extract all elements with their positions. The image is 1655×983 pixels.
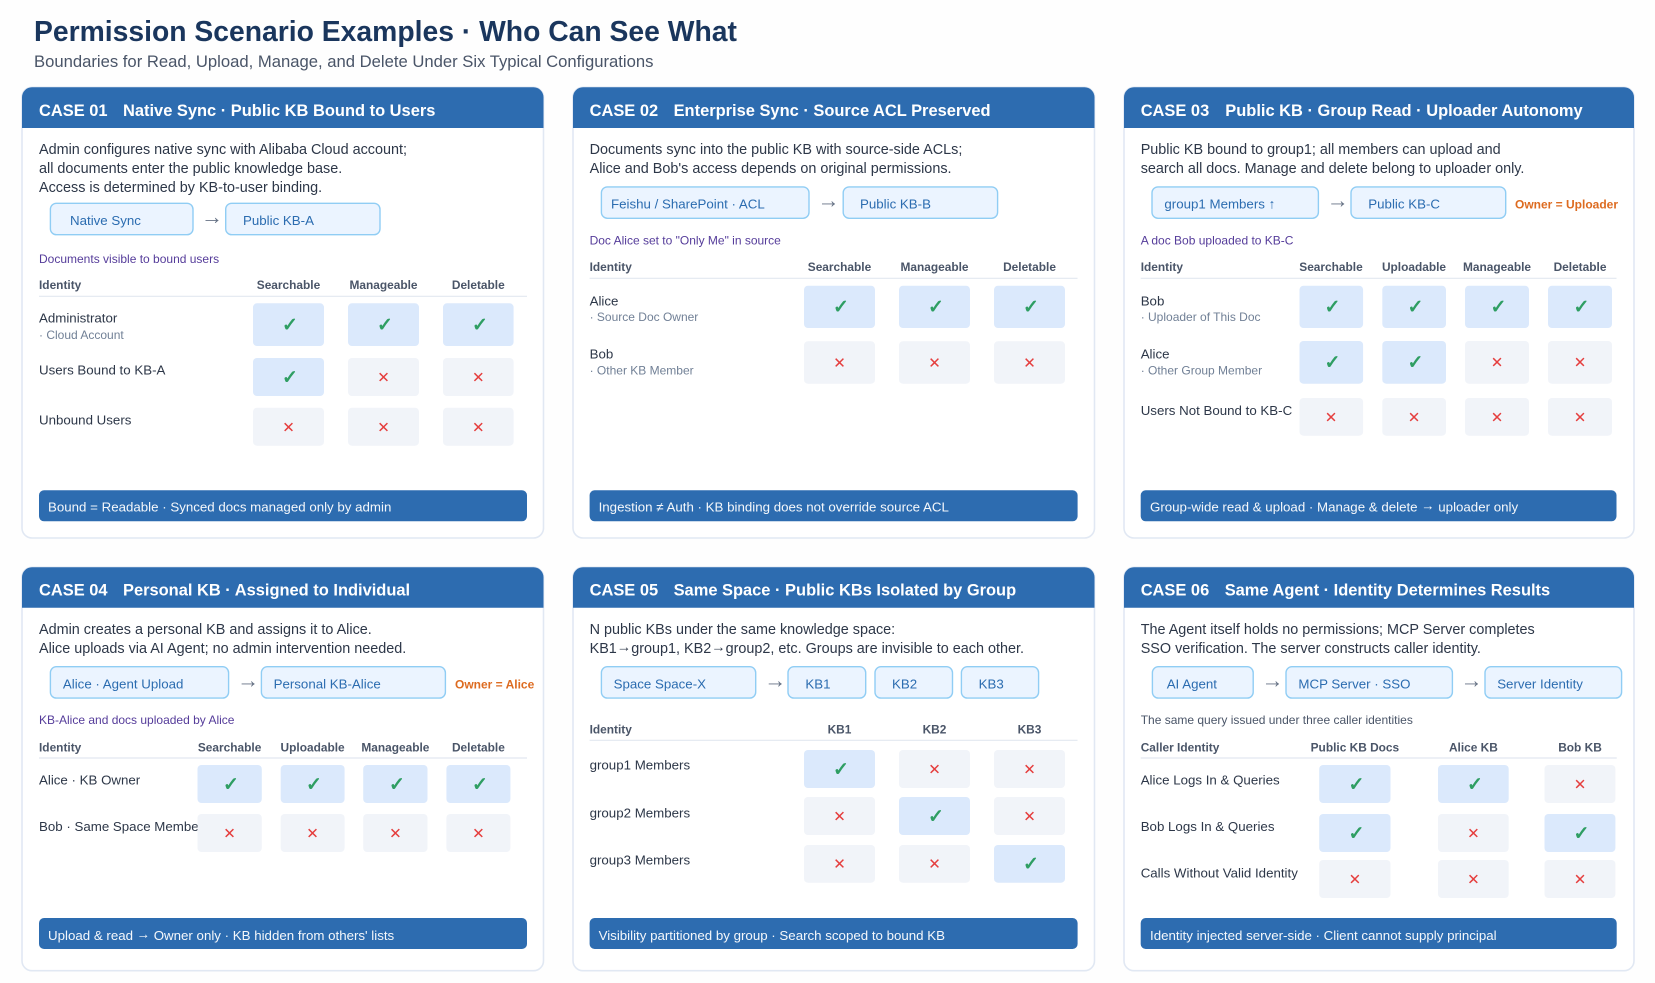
row: Bob Logs In & Queries: ✓ <box>1348 822 1364 844</box>
flow diagram: → <box>201 204 223 229</box>
summary bar: Visibility partitioned by group · Search scoped to bound KB <box>599 928 945 943</box>
row: Alice Logs In & Queries: ✕ <box>1574 776 1586 794</box>
flow diagram: KB3 <box>979 676 1004 691</box>
flow diagram: Owner = Uploader <box>1515 198 1618 212</box>
note: Doc Alice set to "Only Me" in source <box>590 233 781 247</box>
description <box>1141 622 1535 657</box>
summary bar <box>1141 918 1617 949</box>
header: case 05 <box>573 567 1094 608</box>
row: Users Bound to KB-A: Users Bound to KB-A <box>39 363 166 378</box>
row: group1 Members: group1 Members <box>590 758 690 773</box>
row: Calls Without Valid Identity <box>1141 860 1615 898</box>
row: group3 Members: group3 Members <box>590 853 690 868</box>
row: Administrator: · Cloud Account <box>39 328 124 342</box>
row: Bob: · Uploader of This Doc <box>1141 310 1261 324</box>
note: KB-Alice and docs uploaded by Alice <box>39 713 235 727</box>
flow diagram: Public KB-A <box>243 213 314 228</box>
row: Users Not Bound to KB-C: ✕ <box>1408 409 1420 427</box>
row: group3 Members: ✕ <box>928 855 941 873</box>
flow diagram <box>601 187 998 218</box>
row: Alice <box>590 286 1065 328</box>
title: Permission Scenario Examples · Who Can See What <box>34 15 737 47</box>
description <box>590 142 962 177</box>
row: Users Not Bound to KB-C: ✕ <box>1574 409 1586 427</box>
row: Bob Logs In & Queries: Bob Logs In & Queries <box>1141 819 1275 834</box>
summary bar <box>39 490 527 521</box>
description: Admin creates a personal KB and assigns it to Alice. <box>39 622 372 638</box>
summary bar: Bound = Readable · Synced docs managed only by admin <box>48 500 391 514</box>
row: Bob Same Space Member: ✕ <box>306 825 319 843</box>
row: Alice KB Owner: ✓ <box>223 774 239 796</box>
header: case 06 <box>1124 567 1634 608</box>
row: Alice KB Owner <box>39 765 510 803</box>
row: Alice KB Owner: Alice · KB Owner <box>39 773 141 788</box>
row: Bob Logs In & Queries <box>1141 814 1615 852</box>
flow diagram: Native Sync <box>70 213 141 228</box>
table header: Alice KB <box>1449 740 1498 754</box>
note: Documents visible to bound users <box>39 252 219 266</box>
row: Bob: ✕ <box>928 354 941 372</box>
row: Administrator: ✓ <box>282 314 298 336</box>
table header: Public KB Docs <box>1311 740 1400 754</box>
summary bar <box>1141 490 1616 521</box>
table header: Identity <box>590 722 632 736</box>
row: group3 Members: ✕ <box>833 855 846 873</box>
row: Alice: ✓ <box>928 296 944 318</box>
panel: case 04 <box>22 567 544 971</box>
table header <box>39 740 527 758</box>
flow diagram: → <box>1460 667 1482 692</box>
row: Alice Logs In & Queries: Alice Logs In & Queries <box>1141 773 1280 788</box>
row: group2 Members: ✓ <box>928 806 944 828</box>
description: The Agent itself holds no permissions; MCP Server completes <box>1141 622 1535 638</box>
description: Alice and Bob's access depends on original permissions. <box>590 161 952 177</box>
header: case 02 <box>573 87 1094 128</box>
row: group1 Members: ✕ <box>928 761 941 779</box>
row: Bob: Bob <box>590 347 613 362</box>
flow diagram: Alice · Agent Upload <box>63 676 183 691</box>
header: case 02: Enterprise Sync · Source ACL Preserved <box>674 102 991 120</box>
row: Alice Logs In & Queries: ✓ <box>1348 774 1364 796</box>
row: Alice: Alice <box>590 293 618 308</box>
table header: Deletable <box>1554 260 1607 274</box>
row: group2 Members: ✕ <box>1023 808 1036 826</box>
row: group3 Members: ✓ <box>1023 853 1039 875</box>
flow diagram: → <box>1327 188 1349 213</box>
row: group1 Members <box>590 750 1065 788</box>
row: Unbound Users: ✕ <box>472 418 485 436</box>
description: Public KB bound to group1; all members can upload and <box>1141 142 1501 158</box>
table header: Manageable <box>1463 260 1531 274</box>
table header: Caller Identity <box>1141 740 1220 754</box>
row: Unbound Users: ✕ <box>282 418 295 436</box>
description: group1, KB2 <box>631 641 711 657</box>
flow diagram <box>50 667 535 698</box>
row: Bob: Bob <box>1141 293 1164 308</box>
table header: Manageable <box>361 740 430 754</box>
row: group3 Members <box>590 845 1065 883</box>
flow diagram: → <box>818 188 840 213</box>
row: Alice: ✓ <box>1325 352 1340 374</box>
flow diagram: → <box>1262 667 1284 692</box>
description: N public KBs under the same knowledge space: <box>590 622 895 638</box>
table header: Uploadable <box>281 740 345 754</box>
row: Bob Same Space Member: ✕ <box>389 825 402 843</box>
row: Bob: ✕ <box>1023 354 1036 372</box>
header: case 03 <box>1124 87 1634 128</box>
summary bar: → <box>137 926 150 942</box>
row: Bob Logs In & Queries: ✕ <box>1467 825 1480 843</box>
description: group2, etc. Groups are invisible to each other. <box>726 641 1024 657</box>
summary bar: Owner only · KB hidden from others' lists <box>150 928 395 943</box>
row: Users Not Bound to KB-C: Users Not Bound to KB-C <box>1141 403 1293 418</box>
panel: case 05 <box>573 567 1094 971</box>
row: group1 Members: ✓ <box>833 758 849 780</box>
table header: Deletable <box>1003 260 1056 274</box>
header: case 04: CASE 04 <box>39 582 108 600</box>
row: Users Not Bound to KB-C: ✕ <box>1325 409 1337 427</box>
row: Alice: · Source Doc Owner <box>590 310 698 324</box>
summary bar: → <box>1421 498 1435 513</box>
header: case 04: Personal KB · Assigned to Individual <box>123 582 410 600</box>
description <box>39 142 407 196</box>
summary bar: Group-wide read & upload · Manage & delete <box>1150 500 1418 514</box>
row: Users Bound to KB-A: ✕ <box>377 369 390 387</box>
table header <box>1141 740 1617 758</box>
row: Unbound Users: ✕ <box>377 418 390 436</box>
flow diagram <box>1152 187 1618 218</box>
row: Bob <box>590 341 1065 384</box>
summary bar: Identity injected server-side · Client cannot supply principal <box>1150 928 1497 943</box>
row: Bob: ✓ <box>1408 296 1423 318</box>
table header: KB2 <box>923 722 947 736</box>
row: Alice KB Owner: ✓ <box>306 774 322 796</box>
header: case 06: CASE 06 <box>1141 582 1209 600</box>
header: case 02: CASE 02 <box>590 102 658 120</box>
table header: Searchable <box>808 260 872 274</box>
table header: KB3 <box>1018 722 1042 736</box>
header: case 01: Native Sync · Public KB Bound to Users <box>123 102 435 120</box>
summary bar: uploader only <box>1435 500 1518 514</box>
row: Alice KB Owner: ✓ <box>389 774 405 796</box>
row: group2 Members: group2 Members <box>590 805 690 820</box>
row: Bob: ✓ <box>1491 296 1506 318</box>
row: Bob: ✕ <box>833 354 846 372</box>
row: Calls Without Valid Identity: ✕ <box>1467 871 1480 889</box>
row: Bob Same Space Member: ✕ <box>472 825 485 843</box>
description: SSO verification. The server constructs caller identity. <box>1141 641 1481 657</box>
table header: Manageable <box>349 278 418 292</box>
row: Users Not Bound to KB-C <box>1141 398 1612 436</box>
summary bar <box>590 918 1078 949</box>
row: Calls Without Valid Identity: ✕ <box>1349 871 1361 889</box>
description: Admin configures native sync with Alibaba Cloud account; <box>39 142 407 158</box>
flow diagram: MCP Server · SSO <box>1298 676 1410 691</box>
header: case 03: Public KB · Group Read · Uploader Autonomy <box>1225 102 1584 120</box>
flow diagram: Personal KB-Alice <box>274 676 381 691</box>
flow diagram: → <box>764 667 786 692</box>
table header: Searchable <box>257 278 321 292</box>
header: case 03: CASE 03 <box>1141 102 1209 120</box>
table header: Identity <box>590 260 632 274</box>
description <box>1141 142 1524 177</box>
flow diagram <box>50 203 380 235</box>
header: case 04 <box>22 567 544 608</box>
row: Unbound Users <box>39 408 514 446</box>
row: Bob Same Space Member <box>39 814 510 852</box>
row: Alice Logs In & Queries: ✓ <box>1467 774 1483 796</box>
description: KB1 <box>590 641 617 657</box>
row: Alice: ✓ <box>1408 352 1423 374</box>
row: Bob Same Space Member: Bob · Same Space Member <box>39 819 204 834</box>
row: Bob <box>1141 286 1612 328</box>
row: Administrator: ✓ <box>377 314 393 336</box>
header: case 05: CASE 05 <box>590 582 658 600</box>
row: Users Not Bound to KB-C: ✕ <box>1491 409 1503 427</box>
note: A doc Bob uploaded to KB-C <box>1141 233 1294 247</box>
row: Users Bound to KB-A: ✓ <box>282 366 298 388</box>
row: Alice: ✕ <box>1574 354 1586 372</box>
flow diagram: KB1 <box>805 676 831 691</box>
header: case 01 <box>22 87 544 128</box>
flow diagram: → <box>237 667 259 692</box>
row: Alice: · Other Group Member <box>1141 364 1262 378</box>
summary bar: Upload & read <box>48 928 133 943</box>
description: Alice uploads via AI Agent; no admin intervention needed. <box>39 641 406 657</box>
flow diagram: Feishu / SharePoint · ACL <box>611 197 765 212</box>
flow diagram: KB2 <box>892 676 917 691</box>
description: → <box>711 640 726 656</box>
table header: Deletable <box>452 740 505 754</box>
table header <box>590 260 1078 278</box>
row: group1 Members: ✕ <box>1023 761 1036 779</box>
row: Alice <box>1141 341 1612 384</box>
flow diagram: group1 Members ↑ <box>1164 197 1275 212</box>
table header: Manageable <box>900 260 969 274</box>
flow diagram: Server Identity <box>1497 676 1583 691</box>
row: Bob Logs In & Queries: ✓ <box>1574 822 1589 844</box>
panel: case 06 <box>1124 567 1634 971</box>
table header <box>39 278 527 296</box>
row: Bob: ✓ <box>1325 296 1340 318</box>
table header: Identity <box>39 278 82 292</box>
row: group2 Members <box>590 797 1065 835</box>
description <box>590 622 1024 657</box>
row: Bob: ✓ <box>1574 296 1589 318</box>
description: Access is determined by KB-to-user binding. <box>39 180 322 196</box>
row: Calls Without Valid Identity: ✕ <box>1574 871 1586 889</box>
table header: Bob KB <box>1558 740 1602 754</box>
row: Users Bound to KB-A <box>39 358 514 396</box>
panel: case 03 <box>1124 87 1634 538</box>
description: search all docs. Manage and delete belong to uploader only. <box>1141 161 1524 177</box>
row: Alice KB Owner: ✓ <box>472 774 488 796</box>
table header: Searchable <box>198 740 262 754</box>
row: Alice Logs In & Queries <box>1141 765 1615 803</box>
summary bar <box>39 918 527 949</box>
panel: case 02 <box>573 87 1094 538</box>
table header: Searchable <box>1299 260 1363 274</box>
header: case 06: Same Agent · Identity Determines Results <box>1225 582 1550 600</box>
table header: KB1 <box>828 722 852 736</box>
summary bar: Ingestion ≠ Auth · KB binding does not override source ACL <box>599 500 949 514</box>
table header <box>590 722 1078 740</box>
flow diagram: Space Space-X <box>614 676 706 691</box>
row: Administrator: Administrator <box>39 311 118 326</box>
summary bar <box>590 490 1078 521</box>
row: group2 Members: ✕ <box>833 808 846 826</box>
row: Bob Same Space Member: ✕ <box>223 825 236 843</box>
row: Alice: Alice <box>1141 346 1170 361</box>
table header: Identity <box>39 740 82 754</box>
header: case 05: Same Space · Public KBs Isolated by Group <box>674 582 1016 600</box>
description: all documents enter the public knowledge base. <box>39 161 342 177</box>
description: → <box>617 640 631 656</box>
subtitle: Boundaries for Read, Upload, Manage, and Delete Under Six Typical Configurations <box>34 52 653 71</box>
description <box>39 622 406 657</box>
row: Users Bound to KB-A: ✕ <box>472 369 485 387</box>
table header: Uploadable <box>1382 260 1446 274</box>
description: Documents sync into the public KB with source-side ACLs; <box>590 142 962 158</box>
flow diagram <box>601 667 1039 698</box>
header: case 01: CASE 01 <box>39 102 108 120</box>
panel: case 01 <box>22 87 544 538</box>
row: Alice: ✓ <box>1023 296 1039 318</box>
row: Bob: · Other KB Member <box>590 364 694 378</box>
row: Administrator: ✓ <box>472 314 488 336</box>
table header: Identity <box>1141 260 1183 274</box>
flow diagram: Owner = Alice <box>455 677 535 691</box>
table header <box>1141 260 1616 278</box>
row: Alice: ✓ <box>833 296 849 318</box>
row: Administrator <box>39 303 514 346</box>
table header: Deletable <box>452 278 505 292</box>
flow diagram: AI Agent <box>1167 676 1217 691</box>
flow diagram: Public KB-B <box>860 197 931 212</box>
row: Unbound Users: Unbound Users <box>39 412 132 427</box>
row: Alice: ✕ <box>1491 354 1503 372</box>
flow diagram <box>1152 667 1622 698</box>
row: Calls Without Valid Identity: Calls Without Valid Identity <box>1141 865 1298 880</box>
flow diagram: Public KB-C <box>1368 197 1440 212</box>
note: The same query issued under three caller identities <box>1141 713 1413 727</box>
